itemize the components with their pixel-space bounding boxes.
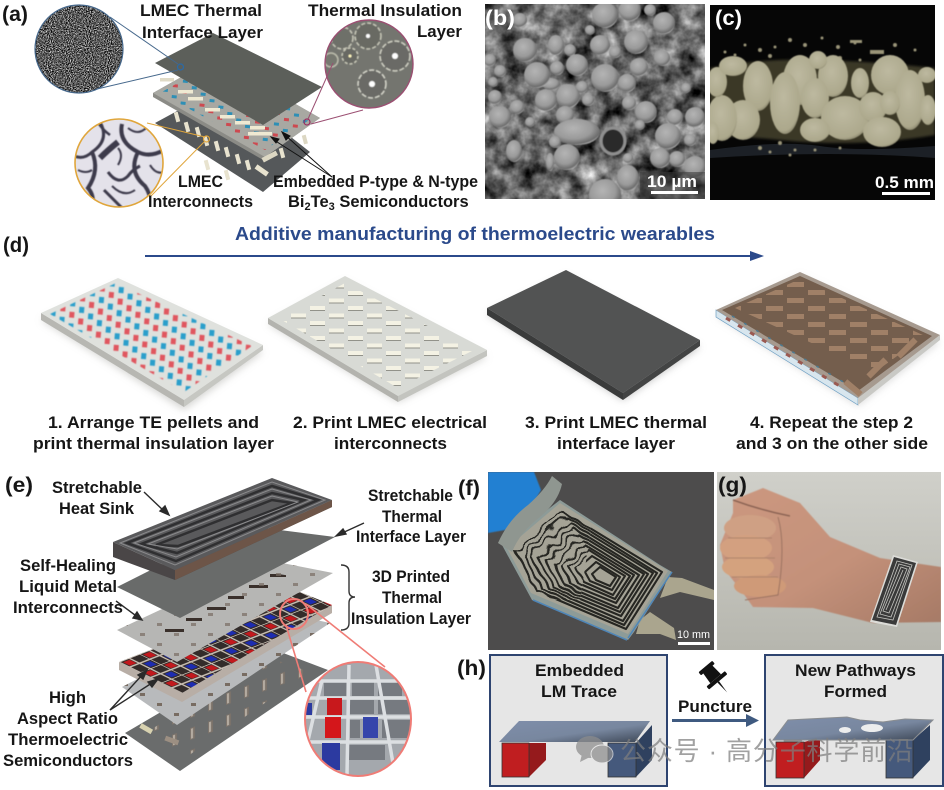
label: LMEC Thermal Interface Layer: [140, 2, 264, 42]
label: 3D Printed Thermal Insulation Layer: 3D Printed: [372, 568, 450, 586]
stretchable heat sink: [113, 478, 332, 580]
label: Self-Healing Liquid Metal Interconnects: Self-Healing: [20, 557, 116, 575]
scattered specks: [724, 36, 916, 156]
label: LMEC Thermal Interface Layer: LMEC Thermal: [140, 2, 262, 20]
label: Stretchable Thermal Interface Layer: [356, 487, 467, 546]
label: 3D Printed Thermal Insulation Layer: [351, 568, 472, 628]
caption step 2: interconnects: [334, 435, 447, 453]
label: embedded semiconductors: 3: [329, 201, 335, 213]
wall background: [717, 472, 941, 650]
panel label e: (e): [5, 474, 33, 497]
panel label g: (g): [718, 474, 747, 497]
process arrow: [145, 251, 764, 261]
bottom sheet with pillars: [125, 648, 328, 771]
zoom circle: thermal interface texture: [34, 4, 184, 94]
label: Thermal Insulation Layer: Thermal Insulation: [308, 2, 462, 20]
box: embedded LM trace: [490, 655, 667, 786]
box: embedded LM trace: LM Trace: [541, 683, 617, 701]
box: new pathways formed: [765, 655, 943, 786]
bottom layer with LMEC interconnects: [155, 85, 310, 192]
blue glove: [488, 472, 541, 533]
panel label f: (f): [458, 477, 480, 500]
caption step 3: 3. Print LMEC thermal: [525, 414, 707, 432]
black background: [710, 5, 935, 200]
label: High Aspect Ratio Thermoelectric Semiconductors: Thermoelectric: [8, 731, 128, 749]
device base edge: [502, 500, 672, 640]
label: 3D Printed Thermal Insulation Layer: Insulation Layer: [351, 610, 472, 628]
caption step 1: [33, 414, 275, 453]
panel a: exploded device diagram: [2, 0, 478, 213]
scale bar: 0.5 mm: 0.5 mm: [875, 173, 934, 192]
label: Stretchable Heat Sink: Stretchable: [52, 479, 142, 497]
lattice plate with thermoelectric pellets: [119, 592, 332, 702]
upper sheet with liquid metal interconnects: [117, 560, 333, 662]
lower perforated insulation sheet: [122, 610, 330, 725]
step 1 plate: TE pellets: [41, 278, 263, 410]
panel h: puncture healing: [457, 655, 943, 786]
scale bar: 10 um: 10 µm: [647, 172, 697, 191]
scale bar: 10 um: [640, 172, 705, 199]
label: Stretchable Thermal Interface Layer: Thermal: [382, 508, 442, 526]
caption step 4: [736, 414, 928, 453]
insulation layer with P-type and N-type pellets: [153, 58, 320, 163]
SEM particles: [484, 0, 706, 211]
caption step 4: and 3 on the other side: [736, 435, 928, 453]
label: 3D Printed Thermal Insulation Layer: Thermal: [382, 589, 442, 607]
panel b: SEM micrograph: [484, 0, 706, 211]
box: new pathways formed: New Pathways: [795, 662, 916, 680]
label: embedded semiconductors: Te: [311, 193, 329, 211]
label: Thermal Insulation Layer: Layer: [417, 23, 463, 41]
scale bar: 10 mm: 10 mm: [677, 629, 710, 641]
label: embedded semiconductors: Bi: [288, 193, 304, 211]
zoom circle: LMEC interconnect micrograph: [74, 118, 210, 208]
stretchable thermal interface layer: [117, 525, 335, 618]
SEM crater: [601, 128, 625, 154]
gripped device end: [498, 476, 562, 552]
label: Self-Healing Liquid Metal Interconnects: [13, 557, 123, 617]
panel label b: (b): [485, 7, 515, 30]
label: embedded semiconductors: Embedded P-type & N-type: [273, 173, 478, 191]
label: LMEC Interconnects: [148, 173, 253, 211]
step 4 plate: repeated on other side: [716, 272, 940, 406]
label: Self-Healing Liquid Metal Interconnects: Liquid Metal: [19, 578, 117, 596]
icon: chat bubbles: [576, 736, 613, 763]
label: LMEC Interconnects: Interconnects: [148, 193, 253, 211]
caption step 4: 4. Repeat the step 2: [750, 414, 913, 432]
watermark text: 公众号 · 高分子科学前沿: [620, 736, 913, 766]
panel label h: (h): [457, 657, 486, 680]
panel label a: (a): [2, 3, 28, 26]
label: High Aspect Ratio Thermoelectric Semiconductors: Aspect Ratio: [17, 710, 118, 728]
puncture arrow and pin: [672, 659, 759, 727]
caption step 1: 1. Arrange TE pellets and: [48, 414, 259, 432]
step 3 plate: thermal interface layer: [487, 270, 700, 400]
wrist-worn device: [870, 555, 918, 627]
caption step 1: print thermal insulation layer: [33, 435, 275, 453]
arrows to semiconductors: [271, 132, 332, 177]
panel e: exploded stretchable device: [3, 474, 472, 780]
panel g: wrist photo: [717, 472, 941, 650]
panel f: device photo: [488, 472, 714, 650]
label: Stretchable Heat Sink: [52, 479, 142, 518]
device leads: [636, 577, 714, 640]
arrows for panel e: [110, 492, 364, 710]
panel c: cross-section photo: [707, 5, 936, 200]
label: LMEC Thermal Interface Layer: Interface Layer: [142, 24, 264, 42]
panel label c: (c): [715, 7, 742, 30]
label: LMEC Interconnects: LMEC: [178, 173, 223, 191]
caption step 3: interface layer: [557, 435, 676, 453]
panel label d: (d): [3, 234, 29, 257]
serpentine heat sink: [507, 503, 668, 634]
label: Stretchable Heat Sink: Heat Sink: [59, 500, 135, 518]
label: Thermal Insulation Layer: [308, 2, 463, 41]
label: embedded semiconductors: [273, 173, 478, 213]
label: High Aspect Ratio Thermoelectric Semiconductors: [3, 689, 133, 770]
label: Stretchable Thermal Interface Layer: Stretchable: [368, 487, 453, 505]
SEM background: [485, 4, 705, 199]
scale bar: 10 mm: [678, 630, 710, 645]
puncture arrow and pin: Puncture: [678, 698, 752, 716]
scale bar: 0.5 mm: [876, 176, 933, 195]
label: embedded semiconductors: Semiconductors: [335, 193, 469, 211]
label: High Aspect Ratio Thermoelectric Semiconductors: Semiconductors: [3, 752, 133, 770]
dark table background: [488, 472, 714, 650]
label: Self-Healing Liquid Metal Interconnects: Interconnects: [13, 599, 123, 617]
label: High Aspect Ratio Thermoelectric Semiconductors: High: [49, 689, 86, 707]
top LMEC thermal interface layer: [155, 33, 322, 125]
caption step 2: [293, 414, 487, 453]
lower substrate band: [710, 144, 935, 158]
label: Stretchable Thermal Interface Layer: Interface Layer: [356, 528, 467, 546]
arm and fist: [720, 488, 941, 623]
heading: Additive manufacturing of thermoelectric wearables: [235, 224, 715, 244]
box: embedded LM trace: Embedded: [535, 662, 624, 680]
dark fill behind blobs: [709, 60, 935, 143]
magnifier callout: [280, 599, 420, 780]
caption step 2: 2. Print LMEC electrical: [293, 414, 487, 432]
label: embedded semiconductors: 2: [304, 201, 311, 213]
caption step 3: [525, 414, 707, 453]
brace for insulation layer: [341, 565, 355, 630]
panel d: manufacturing steps: [3, 224, 940, 453]
step 2 plate: printed interconnects: [268, 276, 487, 402]
metal blobs: [707, 51, 936, 147]
zoom circle: thermal insulation microspheres: [304, 20, 413, 125]
box: new pathways formed: Formed: [824, 683, 887, 701]
watermark: [576, 736, 913, 766]
